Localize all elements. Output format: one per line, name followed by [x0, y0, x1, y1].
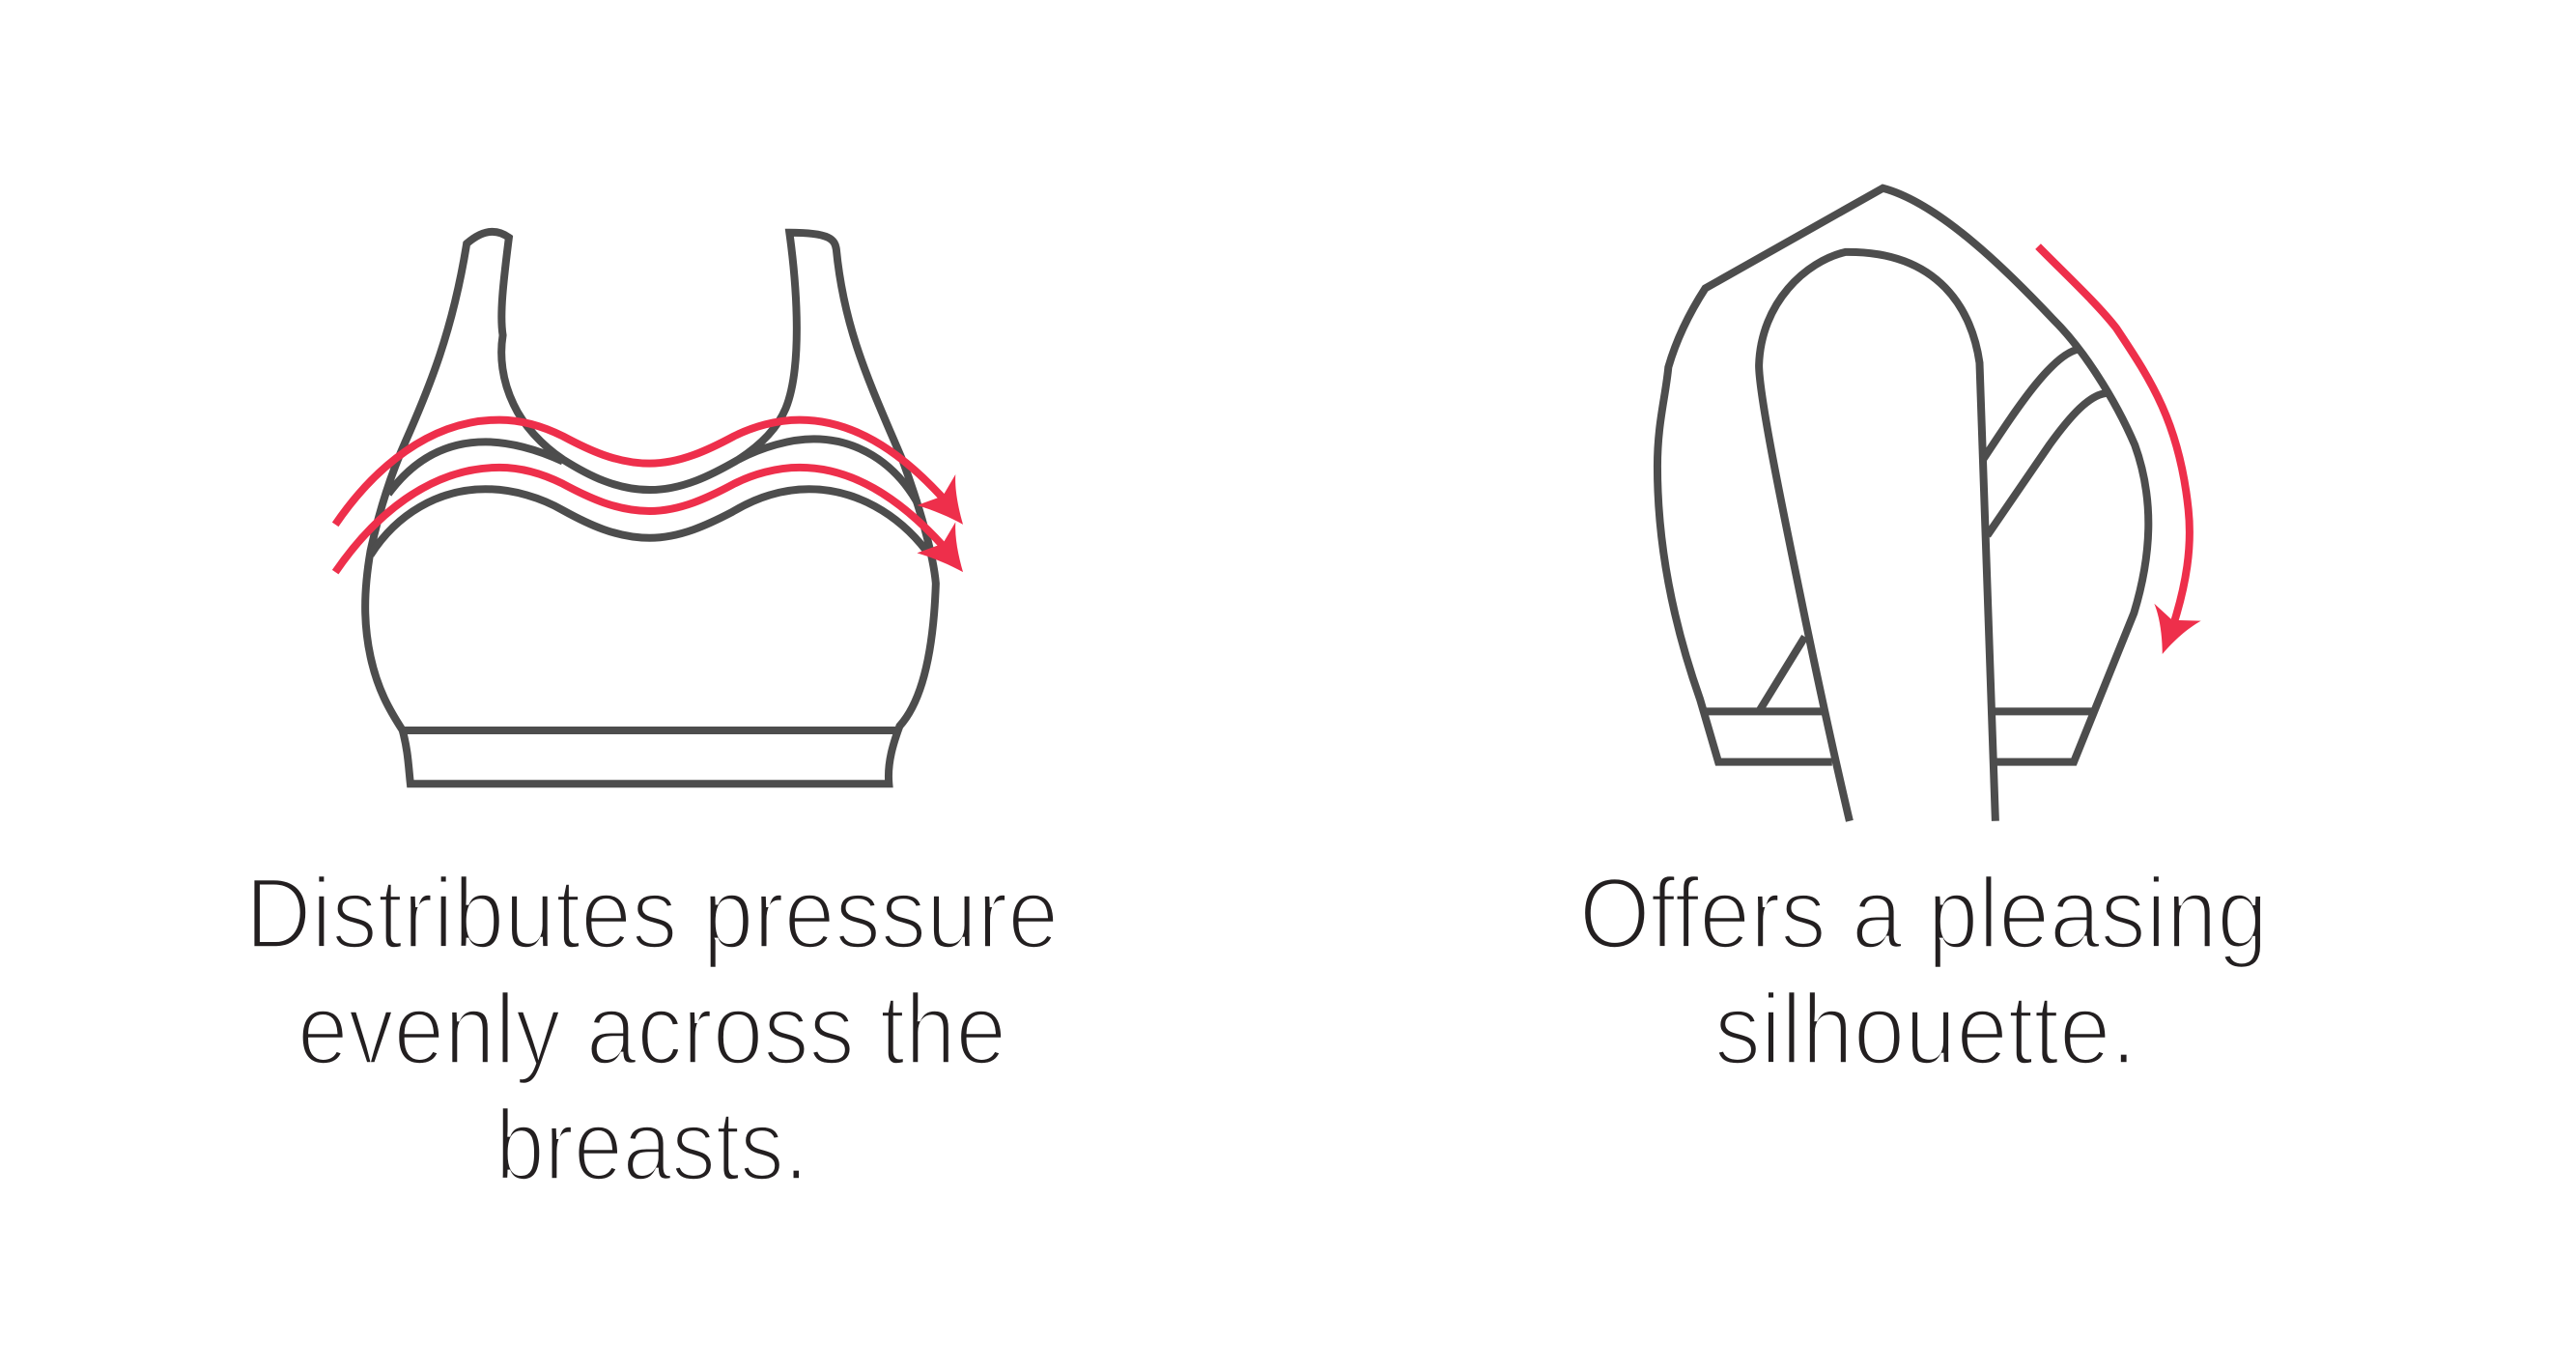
lower cup seam [371, 489, 926, 555]
caption: right [1579, 858, 2268, 1086]
red arrow: lower [335, 468, 963, 572]
strap seams [1984, 349, 2109, 535]
red arrow: down shoulder [2038, 246, 2201, 654]
icon: shoulder silhouette with arrow [1657, 188, 2201, 821]
hem seams [1703, 637, 2092, 711]
caption: left: breasts. [495, 1090, 808, 1202]
outer shoulder and back [1657, 188, 2148, 762]
upper cup seam [388, 439, 917, 502]
garment outline [1759, 252, 1996, 821]
icon: bra with pressure arrows [335, 232, 963, 784]
caption: left: Distributes pressure [245, 858, 1059, 970]
caption: left: evenly across the [297, 974, 1006, 1086]
bra outline [365, 232, 936, 784]
red arrow: upper [335, 420, 963, 525]
caption: right: silhouette. [1714, 974, 2137, 1086]
caption: right: Offers a pleasing [1579, 858, 2268, 970]
caption: left [245, 858, 1059, 1202]
band seam [403, 727, 899, 734]
